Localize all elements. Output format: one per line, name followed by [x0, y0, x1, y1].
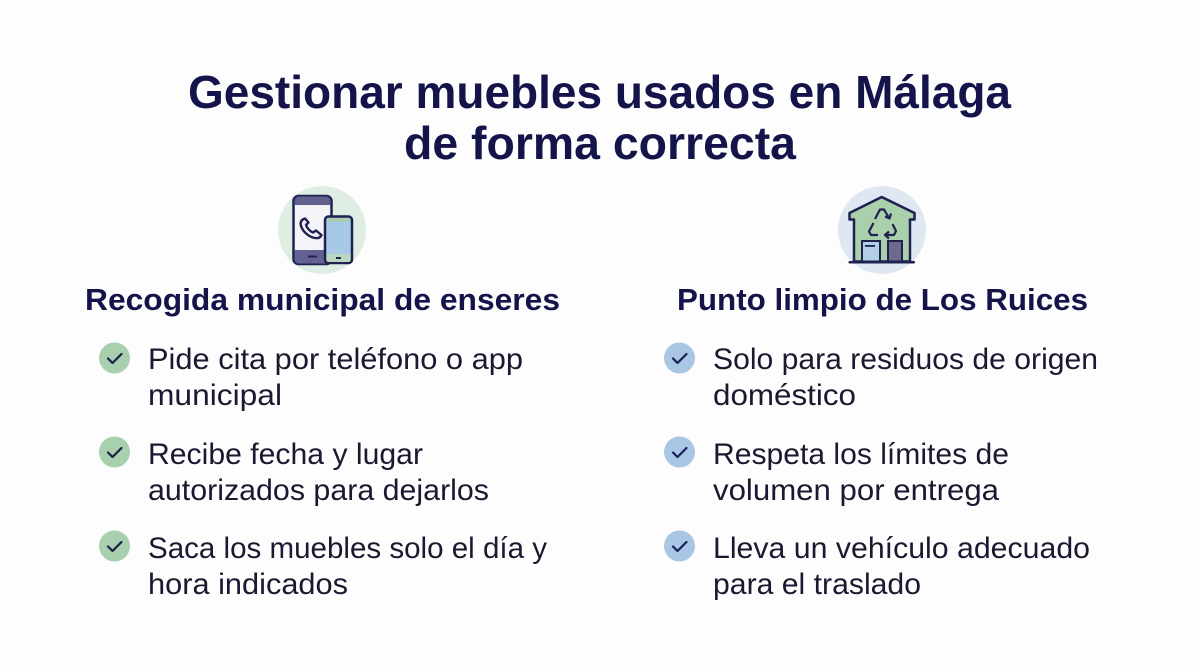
item: recibe fecha: autorizados para dejarlos: [148, 474, 489, 507]
icon: phones: [278, 186, 366, 274]
item: solo residuos: [664, 342, 1098, 412]
title: de forma correcta: [404, 117, 796, 169]
item: respeta límites: [664, 436, 1009, 507]
item: pide cita: municipal: [148, 379, 282, 412]
item: lleva vehículo: Lleva un vehículo adecuado: [713, 532, 1090, 565]
panel: recogida municipal: [85, 186, 560, 601]
heading: recogida municipal: Recogida municipal de enseres: [85, 282, 560, 317]
item: saca los muebles: Saca los muebles solo el día y: [148, 532, 547, 565]
item: pide cita: [99, 342, 523, 412]
heading: punto limpio: Punto limpio de Los Ruices: [677, 282, 1088, 317]
item: recibe fecha: Recibe fecha y lugar: [148, 438, 423, 471]
item: solo residuos: Solo para residuos de origen: [713, 343, 1098, 376]
item: recibe fecha: [99, 436, 489, 507]
item: lleva vehículo: para el traslado: [713, 568, 921, 601]
item: saca los muebles: hora indicados: [148, 568, 348, 601]
icon: recycling warehouse: [838, 186, 926, 274]
item: respeta límites: Respeta los límites de: [713, 438, 1009, 471]
item: pide cita: Pide cita por teléfono o app: [148, 343, 523, 376]
title: Gestionar muebles usados en Málaga: [188, 66, 1011, 118]
item: solo residuos: doméstico: [713, 379, 856, 412]
panel: punto limpio: [664, 186, 1098, 601]
item: respeta límites: volumen por entrega: [713, 474, 999, 507]
title: [188, 66, 1011, 169]
item: lleva vehículo: [664, 530, 1090, 601]
item: saca los muebles: [99, 530, 547, 601]
